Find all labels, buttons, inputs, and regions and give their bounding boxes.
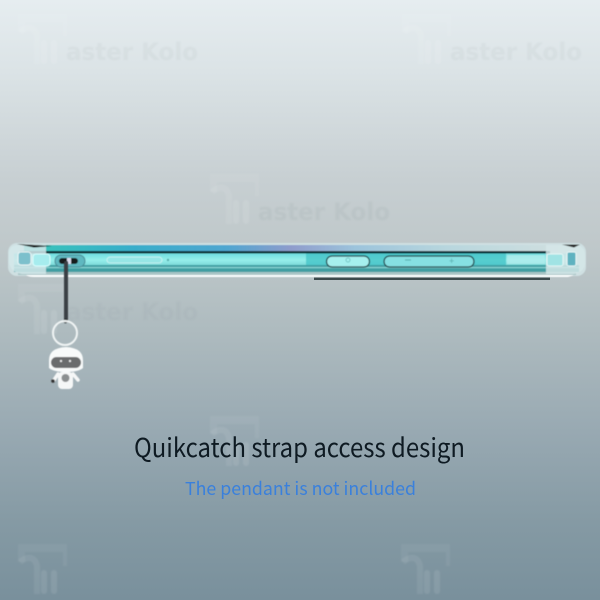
watermarks: aster Kolo bbox=[66, 298, 198, 326]
strap bbox=[64, 261, 68, 322]
subheading note: The pendant is not included bbox=[185, 475, 416, 501]
middle band bbox=[14, 254, 574, 266]
watermarks: aster Kolo bbox=[66, 38, 198, 66]
case outline bbox=[8, 243, 586, 276]
lower band bbox=[14, 265, 579, 272]
speaker grille bbox=[507, 255, 545, 264]
ring bbox=[53, 321, 77, 345]
robot helmet bbox=[49, 347, 83, 372]
black corner tip left bbox=[17, 244, 52, 248]
watermarks: aster Kolo bbox=[258, 198, 390, 226]
white bottom edge bbox=[26, 275, 573, 277]
shadow line under phone bbox=[314, 278, 550, 280]
phone side view in clear case: + bbox=[449, 256, 454, 266]
volume button bbox=[384, 256, 474, 267]
heading: Quikcatch strap access design bbox=[134, 428, 465, 465]
power button bbox=[326, 256, 370, 267]
strap slot bbox=[55, 255, 85, 267]
robot visor bbox=[51, 357, 81, 368]
watermarks: aster Kolo bbox=[450, 38, 582, 66]
SIM tray bbox=[107, 257, 162, 263]
pendant strap and robot bbox=[49, 261, 83, 389]
pale lower band bbox=[18, 272, 576, 275]
left corner bumper bbox=[9, 245, 46, 274]
phone side view in clear case bbox=[8, 243, 586, 280]
dark seam bbox=[20, 251, 550, 254]
robot body bbox=[58, 372, 73, 389]
robot arms bbox=[54, 374, 58, 380]
top colour band bbox=[24, 245, 559, 252]
right corner bumper bbox=[546, 245, 585, 274]
